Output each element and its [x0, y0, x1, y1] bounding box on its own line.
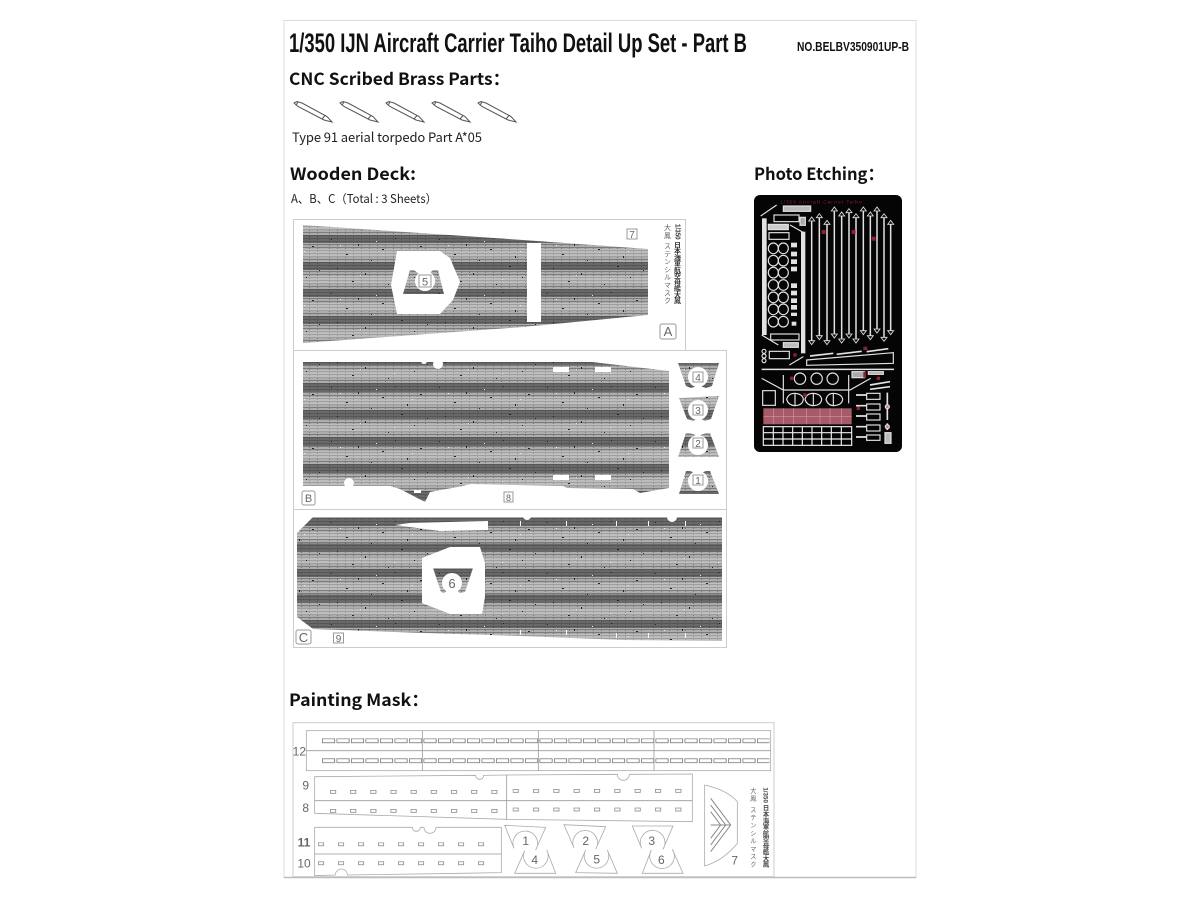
etched rods	[812, 208, 891, 343]
mask 12	[293, 731, 771, 771]
sheet letter B: B	[305, 493, 312, 505]
icon: torpedo 1	[294, 102, 332, 122]
part 2	[678, 433, 719, 457]
part 1	[679, 471, 719, 494]
torpedo caption: Type 91 aerial torpedo Part A*05	[292, 127, 482, 146]
tall frame bars	[762, 218, 805, 353]
deck C slit	[395, 521, 488, 531]
part 6: 6	[448, 576, 456, 591]
label 8: 8	[506, 493, 511, 503]
oval ladder	[768, 243, 788, 327]
vertical Japanese legend	[664, 223, 681, 305]
masks 11 and 10	[297, 827, 501, 876]
deck A slit	[527, 243, 541, 322]
label 9: 9	[336, 634, 342, 645]
masks 9 and 8	[302, 774, 692, 822]
product number: NO.BELBV350901UP-B	[797, 40, 909, 54]
masks 1 and 4: 1	[522, 834, 529, 848]
masks 1 and 4	[505, 825, 556, 873]
deck B planking	[303, 362, 669, 502]
heading: wooden deck: Wooden Deck:	[290, 160, 416, 185]
title: 1/350 IJN Aircraft Carrier Taiho Detail Up Set - Part B	[289, 28, 747, 58]
part 3	[679, 396, 719, 421]
part 6	[433, 568, 473, 593]
part 5: 5	[422, 276, 428, 288]
mask 7 fan: 7	[731, 853, 738, 867]
masks 2 and 5: 2	[582, 834, 589, 848]
label 7: 7	[629, 230, 635, 241]
masks 9 and 8: 8	[302, 801, 309, 815]
sheet letter B	[302, 491, 315, 505]
lower grid	[763, 427, 852, 445]
part 3: 3	[695, 406, 701, 417]
mask 7 fan	[705, 785, 738, 867]
card bottom edge	[284, 876, 916, 878]
deck C planking	[297, 517, 722, 641]
icon: torpedo 2	[340, 102, 378, 122]
masks 3 and 6: 3	[648, 834, 655, 848]
deck A planking	[303, 225, 648, 343]
masks 2 and 5	[564, 825, 617, 873]
red grating panel	[763, 408, 852, 424]
icon: torpedo 4	[432, 102, 470, 122]
deck C elevator cutout	[422, 547, 485, 614]
arch panels	[763, 391, 843, 406]
small fittings column	[791, 243, 797, 326]
icon: torpedo 5	[478, 102, 516, 122]
vertical Japanese legend	[749, 786, 769, 869]
label 9	[334, 633, 344, 645]
panel: wooden deck sheet A	[294, 220, 686, 350]
panel: wooden deck sheet C	[294, 510, 726, 648]
mask 12: 12	[293, 745, 306, 759]
sheet letter C	[296, 630, 311, 645]
part 1: 1	[695, 476, 701, 487]
vertical Japanese legend: 大鳳 ステンシルマスク	[749, 786, 756, 868]
panel: wooden deck sheet B	[294, 350, 726, 510]
vertical Japanese legend: 1/350 日本海軍航空母艦大鳳	[674, 224, 681, 305]
heading: CNC scribed brass parts: CNC Scribed Brass Parts：	[289, 65, 510, 90]
masks 9 and 8: 9	[302, 778, 309, 792]
vertical Japanese legend: 1/350 日本海軍航空母艦大鳳	[761, 787, 769, 869]
fret title: 1/350 Aircraft Carrier Taiho	[780, 199, 862, 205]
wooden deck sheet note: A、B、C（Total : 3 Sheets）	[291, 190, 437, 207]
masks 3 and 6: 6	[658, 853, 665, 867]
masks 3 and 6	[632, 826, 683, 873]
heading: photo etching: Photo Etching：	[754, 160, 884, 185]
masks 11 and 10: 10	[297, 857, 311, 871]
red markings	[790, 230, 880, 410]
icon: torpedo 3	[386, 102, 424, 122]
sheet letter A	[660, 324, 676, 339]
right side fittings	[856, 382, 891, 443]
label 8	[504, 492, 513, 503]
part 2: 2	[695, 439, 701, 450]
deck A elevator cutout	[391, 251, 460, 314]
part 4: 4	[695, 373, 701, 384]
wedge strips	[762, 349, 894, 369]
part 5	[403, 270, 444, 294]
vertical Japanese legend: 大鳳 ステンシルマスク	[664, 223, 671, 304]
deck C notches	[520, 512, 686, 638]
page card	[284, 20, 916, 878]
sheet letter C: C	[299, 630, 308, 645]
top brackets	[761, 205, 811, 239]
ring row	[762, 372, 883, 403]
lower brackets	[762, 334, 803, 365]
panel: photo etching fret	[754, 195, 902, 452]
panel: painting mask sheet	[293, 723, 774, 877]
part 4	[678, 363, 719, 388]
heading: painting mask: Painting Mask：	[289, 686, 429, 711]
masks 1 and 4: 4	[531, 853, 538, 867]
label 7	[627, 229, 637, 241]
sheet letter A: A	[664, 324, 673, 339]
deck B notches and openings	[344, 358, 611, 493]
masks 11 and 10: 11	[298, 836, 311, 850]
icons: five torpedoes	[294, 102, 516, 122]
masks 2 and 5: 5	[593, 852, 600, 866]
